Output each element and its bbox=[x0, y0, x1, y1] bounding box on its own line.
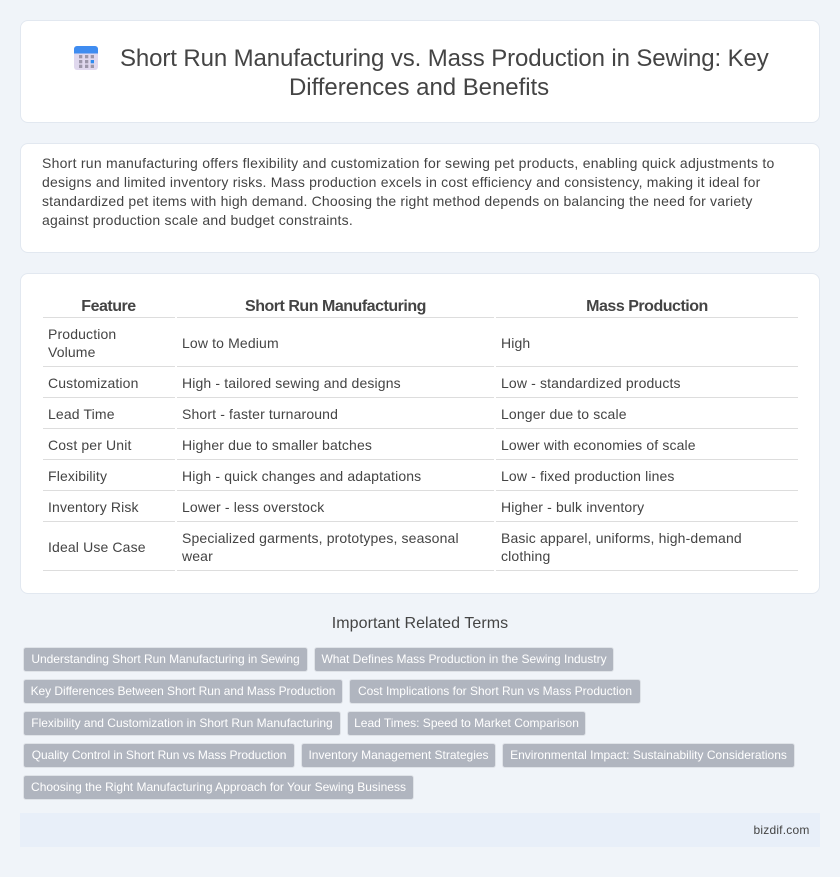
row: Production Volume: Volume bbox=[48, 344, 96, 360]
row: Cost per Unit: Higher due to smaller batches bbox=[182, 437, 372, 453]
tag bbox=[23, 775, 414, 800]
row: Lead Time: Lead Time bbox=[48, 406, 115, 422]
tag: Flexibility and Customization in Short Run Manufacturing bbox=[31, 716, 333, 730]
row: Inventory Risk: Higher - bulk inventory bbox=[501, 499, 644, 515]
intro paragraph: standardized pet items with high demand. Choosing the right method depends on balancing the need for variety bbox=[42, 193, 753, 209]
row: Production Volume: Production bbox=[48, 326, 116, 342]
row: Flexibility: High - quick changes and adaptations bbox=[182, 468, 421, 484]
tag: What Defines Mass Production in the Sewing Industry bbox=[321, 652, 607, 666]
row: Ideal Use Case: Ideal Use Case bbox=[48, 539, 146, 555]
footer bar bbox=[20, 813, 820, 847]
table header row: Feature bbox=[81, 298, 136, 315]
comparison table bbox=[43, 298, 798, 571]
footer: site name: bizdif.com bbox=[754, 823, 810, 837]
heading: related terms: Important Related Terms bbox=[332, 615, 508, 632]
row: Flexibility bbox=[43, 468, 798, 491]
row: Customization: High - tailored sewing and designs bbox=[182, 375, 401, 391]
row: Customization bbox=[43, 375, 798, 398]
row: Flexibility: Flexibility bbox=[48, 468, 107, 484]
tag: Quality Control in Short Run vs Mass Production bbox=[32, 748, 286, 762]
tag bbox=[314, 647, 614, 672]
row: Inventory Risk bbox=[43, 499, 798, 522]
tag bbox=[23, 679, 343, 704]
row: Cost per Unit: Lower with economies of scale bbox=[501, 437, 696, 453]
table header row: Short Run Manufacturing bbox=[245, 298, 426, 315]
panel: title card bbox=[20, 20, 820, 123]
intro paragraph: designs and limited inventory risks. Mass production excels in cost efficiency and consistency, making it ideal for bbox=[42, 174, 761, 190]
row: Lead Time: Longer due to scale bbox=[501, 406, 627, 422]
intro paragraph: against production scale and budget constraints. bbox=[42, 212, 353, 228]
row: Production Volume: High bbox=[501, 335, 530, 351]
intro paragraph bbox=[42, 155, 775, 228]
tag bbox=[23, 743, 295, 768]
tag bbox=[502, 743, 795, 768]
title bbox=[120, 45, 769, 101]
table header row: Mass Production bbox=[586, 298, 708, 315]
row: Customization: Customization bbox=[48, 375, 139, 391]
tag: Key Differences Between Short Run and Mass Production bbox=[31, 684, 335, 698]
row: Cost per Unit: Cost per Unit bbox=[48, 437, 132, 453]
row: Inventory Risk: Inventory Risk bbox=[48, 499, 139, 515]
intro paragraph: Short run manufacturing offers flexibility and customization for sewing pet products, enabling quick adjustments to bbox=[42, 155, 775, 171]
row: Ideal Use Case: wear bbox=[182, 548, 213, 564]
tag: Understanding Short Run Manufacturing in Sewing bbox=[31, 652, 300, 666]
title: Short Run Manufacturing vs. Mass Production in Sewing: Key bbox=[120, 45, 769, 72]
row: Lead Time bbox=[43, 406, 798, 429]
icon: calendar bbox=[74, 46, 98, 70]
row: Ideal Use Case: Specialized garments, prototypes, seasonal bbox=[182, 530, 459, 546]
row: Customization: Low - standardized products bbox=[501, 375, 681, 391]
row: Cost per Unit bbox=[43, 437, 798, 460]
tag bbox=[349, 679, 641, 704]
tag: Cost Implications for Short Run vs Mass Production bbox=[358, 684, 632, 698]
tag bbox=[23, 711, 341, 736]
row: Ideal Use Case bbox=[43, 530, 798, 571]
tag: Inventory Management Strategies bbox=[308, 748, 489, 762]
row: Production Volume bbox=[43, 326, 798, 367]
tag: Choosing the Right Manufacturing Approach for Your Sewing Business bbox=[31, 780, 406, 794]
tag bbox=[347, 711, 586, 736]
row: Ideal Use Case: clothing bbox=[501, 548, 550, 564]
row: Lead Time: Short - faster turnaround bbox=[182, 406, 338, 422]
panel: intro text bbox=[20, 143, 820, 253]
tag bbox=[301, 743, 496, 768]
tag: Lead Times: Speed to Market Comparison bbox=[354, 716, 579, 730]
row: Flexibility: Low - fixed production lines bbox=[501, 468, 675, 484]
tag list: related terms bbox=[23, 647, 795, 800]
tag: Environmental Impact: Sustainability Considerations bbox=[510, 748, 787, 762]
row: Ideal Use Case: Basic apparel, uniforms, high-demand bbox=[501, 530, 742, 546]
row: Inventory Risk: Lower - less overstock bbox=[182, 499, 324, 515]
tag bbox=[23, 647, 308, 672]
panel: comparison table bbox=[20, 273, 820, 594]
table header row bbox=[43, 298, 798, 318]
title: Differences and Benefits bbox=[289, 74, 549, 101]
row: Production Volume: Low to Medium bbox=[182, 335, 279, 351]
